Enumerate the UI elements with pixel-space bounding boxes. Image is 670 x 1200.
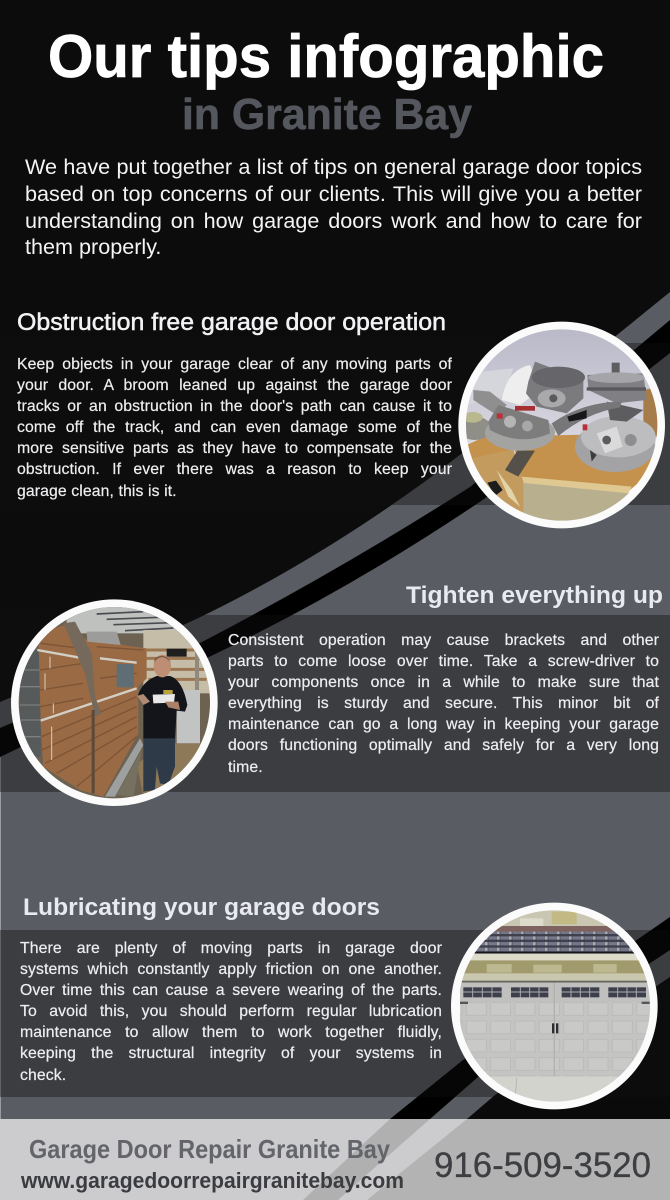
- body text: obstruction free: more sensitive parts as they have to compensate for the: [17, 440, 452, 457]
- body text: tighten everything up: doors functioning optimally and safely for a very long: [228, 737, 659, 754]
- heading: lubricating: Lubricating your garage doors: [23, 894, 380, 921]
- body text: obstruction free: [16, 356, 452, 500]
- footer: phone number: 916-509-3520: [434, 1146, 651, 1185]
- photo: white sectional garage door: [451, 902, 658, 1110]
- body text: tighten everything up: maintenance can go a long way in keeping your garage: [228, 716, 659, 733]
- body text: lubricating: maintenance to allow them to work together fluidly,: [20, 1024, 442, 1041]
- panel: first tip band: [0, 343, 670, 505]
- photo: man with clipboard in a truck of door panels: [11, 599, 218, 806]
- intro text: based on top concerns of our clients. This will give you a better: [25, 181, 642, 206]
- body text: lubricating: [20, 940, 442, 1084]
- body text: obstruction free: garage clean, this is it.: [17, 483, 177, 500]
- body text: lubricating: There are plenty of moving parts in garage door: [20, 940, 442, 957]
- body text: lubricating: systems which constantly apply friction on one another.: [20, 961, 442, 978]
- panel: second tip band: [0, 615, 670, 792]
- title: Our tips infographic: [48, 23, 604, 90]
- body text: obstruction free: Keep objects in your garage clear of any moving parts of: [17, 356, 452, 373]
- body text: tighten everything up: parts to come loose over time. Take a screw-driver to: [228, 653, 659, 670]
- footer: website: www.garagedoorrepairgranitebay.com: [20, 1168, 404, 1193]
- heading: tighten everything up: Tighten everything up: [406, 582, 663, 609]
- body text: lubricating: Over time this can cause a severe wearing of the parts.: [20, 982, 442, 999]
- intro text: understanding on how garage doors work and how to care for: [25, 208, 642, 233]
- body text: tighten everything up: everything is sturdy and secure. This minor bit of: [228, 695, 659, 712]
- intro text: them properly.: [25, 234, 161, 259]
- photo: garage door parts on a bench: [458, 322, 665, 528]
- body text: obstruction free: your door. A broom leaned up against the garage door: [17, 377, 452, 394]
- body text: obstruction free: come off the track, and can even damage some of the: [17, 419, 452, 436]
- footer: company name: Garage Door Repair Granite Bay: [29, 1134, 390, 1164]
- body text: tighten everything up: your components once in a while to make sure that: [228, 674, 659, 691]
- body text: lubricating: keeping the structural integrity of your systems in: [20, 1045, 442, 1062]
- panel: third tip band: [0, 930, 670, 1097]
- body text: tighten everything up: [228, 632, 660, 776]
- body text: tighten everything up: Consistent operation may cause brackets and other: [228, 632, 659, 649]
- panel: footer band: [0, 1119, 670, 1200]
- subtitle: in Granite Bay: [182, 90, 473, 139]
- body text: lubricating: check.: [20, 1067, 66, 1084]
- heading: obstruction free: Obstruction free garage door operation: [17, 309, 446, 336]
- body text: obstruction free: tracks or an obstruction in the door's path can cause it to: [17, 398, 452, 415]
- intro text: [25, 154, 642, 259]
- intro text: We have put together a list of tips on general garage door topics: [25, 154, 642, 179]
- body text: obstruction free: obstruction. If ever there was a reason to keep your: [17, 461, 452, 478]
- body text: lubricating: To avoid this, you should perform regular lubrication: [20, 1003, 442, 1020]
- body text: tighten everything up: time.: [228, 759, 263, 776]
